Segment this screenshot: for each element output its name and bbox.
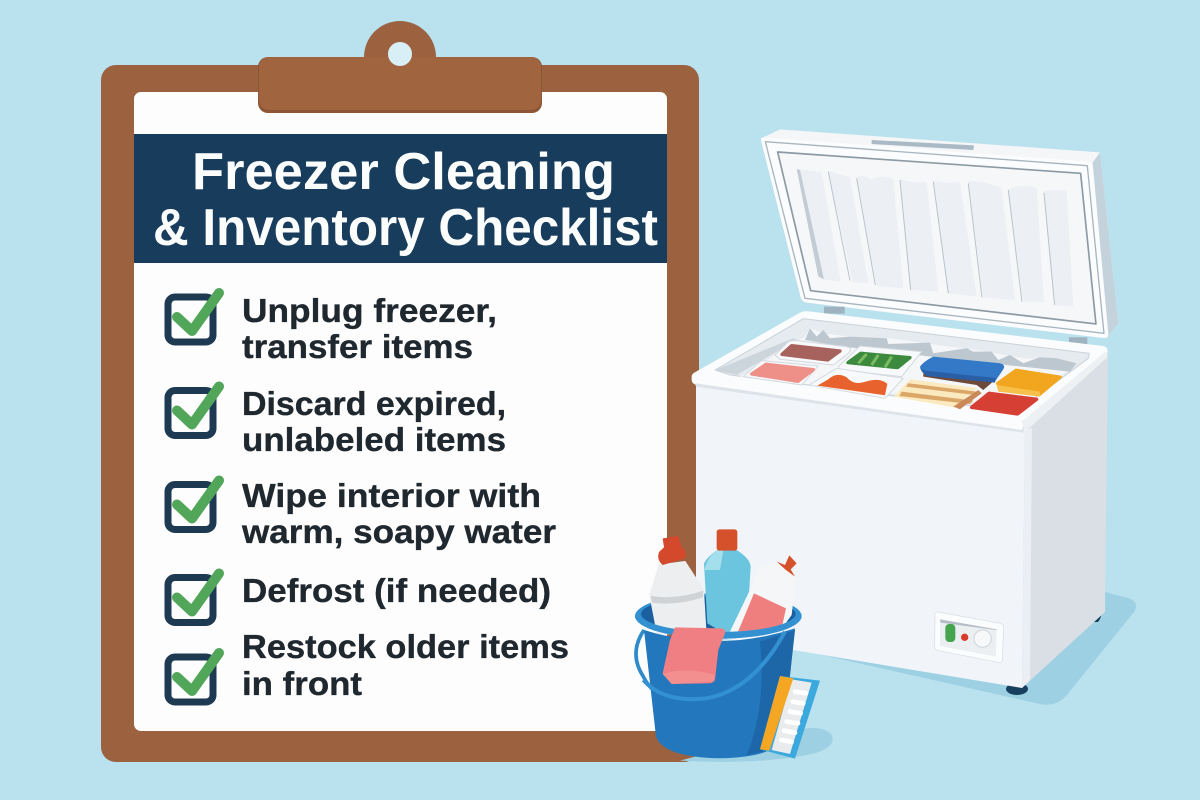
bucket back rim bbox=[635, 593, 802, 639]
bucket shadow bbox=[680, 728, 833, 762]
freezer bbox=[692, 129, 1136, 705]
bucket body bbox=[644, 628, 795, 758]
lid hinges bbox=[824, 307, 1087, 344]
title banner bbox=[134, 134, 667, 263]
checklist item 5: in front bbox=[242, 665, 362, 702]
bucket back handle bbox=[636, 630, 658, 695]
chest rim and interior bbox=[692, 311, 1108, 433]
checklist item 3 bbox=[168, 477, 556, 550]
checklist item 5: Restock older items bbox=[242, 628, 569, 665]
pink cloth bbox=[663, 627, 725, 684]
checklist item 3: warm, soapy water bbox=[241, 513, 556, 550]
bucket front handle bbox=[643, 632, 785, 699]
blue bottle bbox=[704, 529, 751, 635]
pink and white bottle bbox=[728, 555, 797, 635]
freezer body bbox=[696, 350, 1108, 688]
scrub brush bbox=[760, 676, 820, 759]
lid ribs bbox=[797, 169, 1073, 307]
control panel bbox=[935, 612, 1004, 663]
freezer feet bbox=[1006, 610, 1101, 695]
checklist item 1: transfer items bbox=[242, 328, 473, 365]
title banner: Freezer Cleaning bbox=[192, 143, 615, 201]
title banner: & Inventory Checklist bbox=[153, 199, 658, 257]
checklist item 4: Defrost (if needed) bbox=[242, 572, 551, 609]
clipboard bbox=[101, 21, 699, 762]
bucket front rim bbox=[635, 614, 802, 639]
freezer floor shadow bbox=[800, 592, 1136, 705]
checklist item 5 bbox=[168, 628, 569, 702]
checklist item 1 bbox=[168, 292, 497, 365]
checklist item 2: unlabeled items bbox=[242, 421, 506, 458]
checklist item 2 bbox=[168, 385, 506, 458]
lid bbox=[761, 129, 1118, 338]
checklist item 3: Wipe interior with bbox=[242, 477, 541, 514]
white detergent bottle bbox=[650, 536, 706, 635]
checklist item 1: Unplug freezer, bbox=[242, 292, 497, 329]
frozen food containers bbox=[743, 340, 1061, 414]
checklist item 4 bbox=[168, 572, 551, 622]
bucket with cleaning supplies bbox=[635, 529, 833, 762]
clipboard clip bbox=[258, 21, 542, 113]
checklist item 2: Discard expired, bbox=[242, 385, 506, 422]
paper sheet bbox=[134, 92, 667, 731]
clipboard board bbox=[101, 65, 699, 762]
